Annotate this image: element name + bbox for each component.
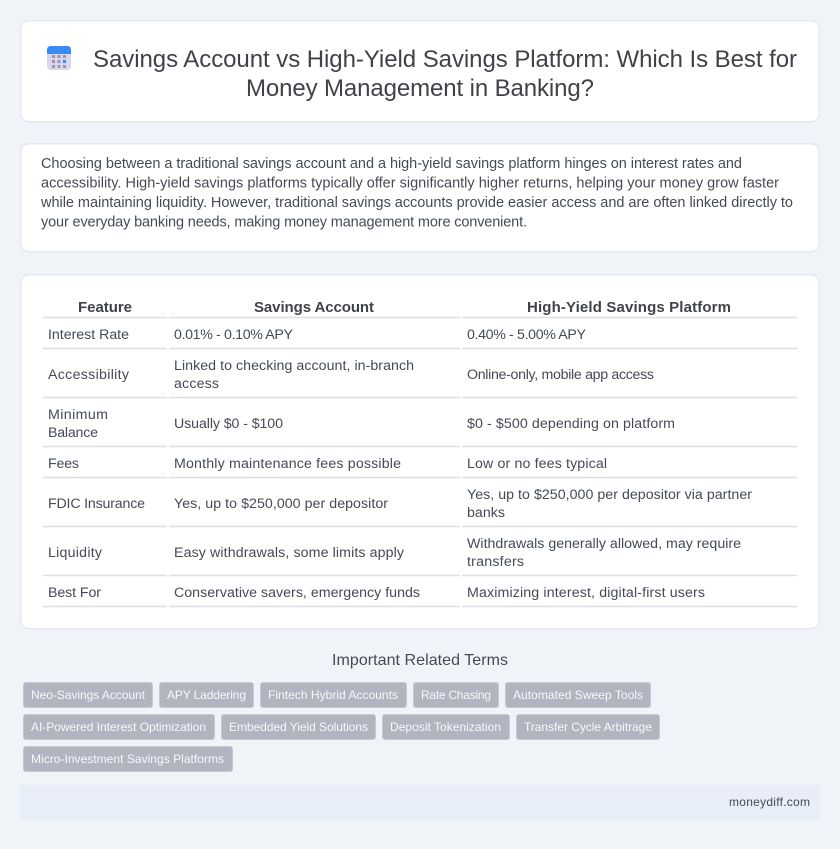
panel: comparison table	[21, 275, 819, 629]
table header: High-Yield Savings Platform	[527, 299, 731, 316]
table header	[78, 299, 731, 316]
row: accessibility	[48, 358, 654, 392]
row: fees: Monthly maintenance fees possible	[174, 456, 401, 472]
row: best for: Conservative savers, emergency funds	[174, 585, 420, 601]
related term tags: Rate Chasing	[421, 688, 491, 702]
related term tags: Micro-Investment Savings Platforms	[31, 752, 224, 766]
row: liquidity: transfers	[467, 554, 524, 570]
table header: Feature	[78, 299, 132, 316]
related term tags: Automated Sweep Tools	[513, 688, 643, 702]
row: best for	[48, 585, 705, 601]
related term tags: Deposit Tokenization	[390, 720, 501, 734]
title: Savings Account vs High-Yield Savings Platform: Which Is Best for	[93, 46, 797, 73]
row: liquidity: Liquidity	[48, 545, 103, 561]
text block: introduction paragraph: while maintaining liquidity. However, traditional savings accounts provide easier access and are often linked directly to	[40, 195, 793, 211]
row: accessibility: access	[174, 376, 219, 392]
row: minimum balance: Minimum	[48, 407, 108, 423]
row: FDIC insurance: Yes, up to $250,000 per depositor via partner	[467, 487, 752, 503]
row: interest rate: Interest Rate	[48, 327, 129, 343]
row: FDIC insurance: banks	[467, 505, 505, 521]
text block: introduction paragraph: accessibility. High-yield savings platforms typically offer significantly higher returns, helping your money grow faster	[41, 176, 779, 192]
row: FDIC insurance: Yes, up to $250,000 per depositor	[174, 496, 388, 512]
row: best for: Best For	[48, 585, 101, 601]
row: liquidity	[48, 536, 741, 570]
row: fees	[48, 456, 607, 472]
row: FDIC insurance	[48, 487, 752, 521]
row: best for: Maximizing interest, digital-first users	[467, 585, 705, 601]
panel: introduction	[21, 144, 819, 252]
related term tags: Transfer Cycle Arbitrage	[524, 720, 652, 734]
row: interest rate: 0.40% - 5.00% APY	[467, 327, 587, 343]
heading: important related terms: Important Related Terms	[332, 652, 508, 669]
text block: introduction paragraph	[40, 156, 793, 230]
icon: calendar	[47, 46, 71, 70]
row: interest rate: 0.01% - 0.10% APY	[174, 327, 294, 343]
row: minimum balance	[48, 407, 675, 441]
related term tags: APY Laddering	[167, 688, 246, 702]
row: fees: Low or no fees typical	[467, 456, 607, 472]
footer	[20, 785, 820, 819]
row: fees: Fees	[48, 456, 79, 472]
related term tags	[24, 682, 660, 772]
row: minimum balance: Usually $0 - $100	[174, 416, 283, 432]
table header: Savings Account	[254, 299, 374, 316]
row: minimum balance: Balance	[48, 425, 98, 441]
row: accessibility: Linked to checking account, in-branch	[174, 358, 414, 374]
title: Money Management in Banking?	[246, 75, 594, 102]
text block: introduction paragraph: your everyday banking needs, making money management more convenient.	[41, 214, 527, 230]
panel: title header	[21, 21, 819, 122]
related term tags: Fintech Hybrid Accounts	[268, 688, 398, 702]
title	[93, 46, 797, 102]
row: FDIC insurance: FDIC Insurance	[48, 496, 145, 512]
row: accessibility: Accessibility	[48, 367, 130, 383]
related term tags: Embedded Yield Solutions	[229, 720, 368, 734]
row: interest rate	[48, 327, 587, 343]
related term tags: Neo-Savings Account	[31, 688, 146, 702]
row: liquidity: Easy withdrawals, some limits apply	[174, 545, 405, 561]
text block: introduction paragraph: Choosing between a traditional savings account and a high-yield savings platform hinges on interest rates and	[41, 156, 742, 172]
row: minimum balance: $0 - $500 depending on platform	[467, 416, 675, 432]
row: liquidity: Withdrawals generally allowed, may require	[467, 536, 741, 552]
footer: moneydiff.com	[729, 795, 810, 809]
row: accessibility: Online-only, mobile app access	[467, 367, 654, 383]
related term tags: AI-Powered Interest Optimization	[31, 720, 206, 734]
